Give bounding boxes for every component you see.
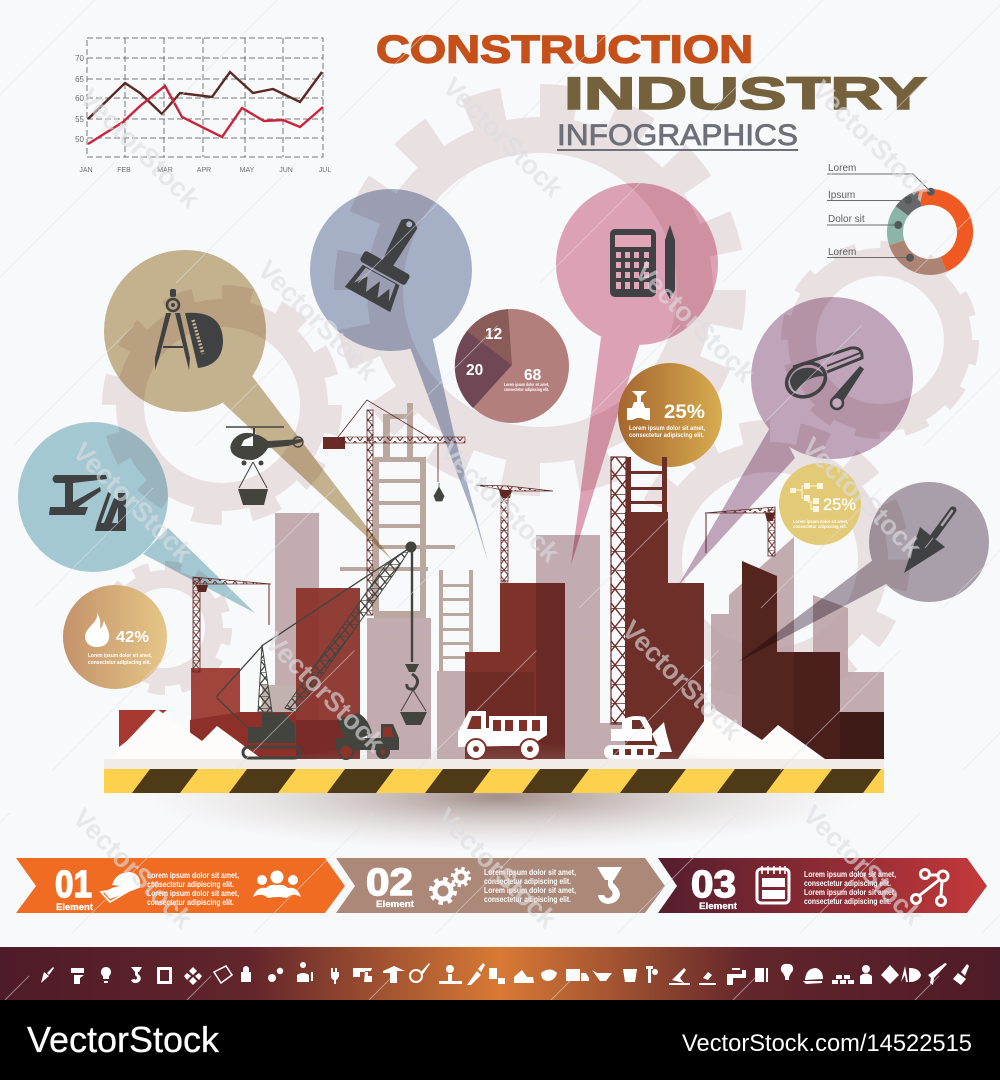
stat circle: 42 percent: Lorem ipsum dolor sit amet, xyxy=(88,653,152,659)
ribbon: element 03: consectetur adipiscing elit. xyxy=(804,896,891,906)
x axis labels: APR xyxy=(197,167,211,174)
ribbon: element 02: 02 xyxy=(366,862,413,904)
watermark text: VectorStock xyxy=(252,255,384,387)
donut legend labels: Dolor sit xyxy=(828,214,865,225)
ribbon: element 03 xyxy=(658,858,987,913)
speech bubble: tan xyxy=(104,250,392,560)
line chart xyxy=(75,38,331,174)
title: construction: CONSTRUCTION xyxy=(376,28,753,72)
x axis labels: FEB xyxy=(117,167,131,174)
city skyline, light buildings xyxy=(262,513,884,759)
speech bubble: teal xyxy=(18,422,255,613)
ribbon: element 02: Lorem ipsum dolor sit amet, xyxy=(484,885,576,895)
stat circle: 42 percent: consectetur adipiscing elit. xyxy=(88,660,151,666)
ribbon: element 02 xyxy=(336,858,665,913)
x axis labels: JUL xyxy=(319,167,331,174)
donut legend labels: Lorem xyxy=(828,247,856,258)
crane hook and bucket xyxy=(400,664,427,725)
y axis labels: 50 xyxy=(75,135,85,144)
x axis labels: MAR xyxy=(157,167,173,174)
watermark text: VectorStock xyxy=(796,432,928,564)
pie values: 20 xyxy=(466,362,483,379)
ribbon: element 01: consectetur adipiscing elit. xyxy=(147,879,234,889)
tower crane: center xyxy=(323,400,465,615)
y axis labels xyxy=(75,54,85,144)
y axis labels: 55 xyxy=(75,115,85,124)
watermark text: VectorStock xyxy=(74,83,206,215)
icon: flame xyxy=(85,613,109,647)
icon: gears xyxy=(431,868,470,903)
ground strip and floor shadow xyxy=(104,743,884,851)
stat circle: 42 percent xyxy=(63,585,167,689)
icon: flowchart xyxy=(790,483,823,512)
x axis labels: MAY xyxy=(240,167,255,174)
y axis labels: 70 xyxy=(75,54,85,63)
ribbon: element 02: consectetur adipiscing elit. xyxy=(484,876,571,886)
ribbon: element 01 xyxy=(16,858,345,913)
stat circle: valve 25 percent xyxy=(618,363,722,467)
watermark text: VectorStock xyxy=(434,437,566,569)
y axis labels: 65 xyxy=(75,75,85,84)
watermark text: VectorStock xyxy=(259,627,391,759)
ribbon: element 02: Element xyxy=(376,899,414,909)
ribbon: element 03: 03 xyxy=(691,864,736,906)
lattice tower with ladder xyxy=(611,457,667,724)
ribbon: element 03: Lorem ipsum dolor sit amet, xyxy=(804,869,896,879)
icon: compass and protractor xyxy=(155,289,223,370)
footer bar: VectorStock xyxy=(27,1019,220,1060)
watermark text: VectorStock xyxy=(437,72,569,204)
hazard stripe bar xyxy=(104,769,884,793)
ribbon: element 01: 01 xyxy=(55,864,92,906)
stat circle: valve 25 percent: 25% xyxy=(664,402,705,423)
chart series: brown xyxy=(88,72,322,119)
x axis labels xyxy=(79,167,331,174)
y axis labels: 60 xyxy=(75,94,85,103)
watermark text xyxy=(67,72,938,935)
icon: paint brush xyxy=(345,207,434,312)
icon: truss beams xyxy=(49,475,126,531)
donut legend labels xyxy=(828,163,865,258)
stat circle: flowchart 25 percent: consectetur adipiscing elit. xyxy=(793,524,847,529)
pie values: 68 xyxy=(524,367,542,384)
speech bubble: gray xyxy=(738,482,989,662)
title: industry: INDUSTRY xyxy=(564,68,927,119)
pie chart circle xyxy=(455,309,569,423)
icon: hard hat xyxy=(101,872,140,902)
icon: network nodes xyxy=(912,870,948,906)
stat circle: valve 25 percent: Lorem ipsum dolor sit amet, xyxy=(629,425,705,432)
donut chart with legend xyxy=(827,163,965,267)
watermark text: VectorStock xyxy=(797,800,929,932)
stat circle: flowchart 25 percent xyxy=(779,463,861,545)
watermark text: VectorStock xyxy=(67,437,199,569)
stat circle: flowchart 25 percent: 25% xyxy=(823,496,856,514)
ribbon: element 01: Lorem ipsum dolor sit amet, xyxy=(147,888,239,898)
mixer truck xyxy=(335,713,399,759)
donut legend labels: Ipsum xyxy=(828,190,855,201)
icon: valve xyxy=(627,391,650,420)
tower crane: right xyxy=(705,507,775,556)
ribbon: element 03: Lorem ipsum dolor sit amet, xyxy=(804,887,896,897)
ribbon: element 01: Element xyxy=(56,902,93,912)
pie values xyxy=(466,326,549,392)
icon: pipes xyxy=(781,348,864,409)
scaffold tower and ladders xyxy=(340,403,473,672)
footer bar: VectorStock.com/14522515 xyxy=(682,1031,972,1057)
stat circle: valve 25 percent: consectetur adipiscing elit. xyxy=(629,432,704,439)
icon: crane hook xyxy=(597,867,622,904)
watermark text: VectorStock xyxy=(616,615,748,747)
ribbon: element 01: Lorem ipsum dolor sit amet, xyxy=(147,870,239,880)
x axis labels: JAN xyxy=(79,167,93,174)
speech bubble: blue xyxy=(310,189,488,562)
speech bubble: pink xyxy=(556,183,718,565)
watermark text: VectorStock xyxy=(67,803,199,935)
helicopter xyxy=(226,427,303,505)
icon: people group xyxy=(253,870,301,898)
title: infographics: INFOGRAPHICS xyxy=(557,119,798,152)
watermark text: VectorStock xyxy=(806,75,938,207)
hook bucket xyxy=(434,483,444,501)
watermark text: VectorStock xyxy=(629,257,761,389)
ribbon: element 02: consectetur adipiscing elit. xyxy=(484,894,571,904)
donut legend labels: Lorem xyxy=(828,163,856,174)
pie values: Lorem ipsum dolor sit amet, xyxy=(504,382,549,387)
toolbar icons xyxy=(41,962,969,985)
background gears xyxy=(105,102,972,688)
snow mounds xyxy=(110,708,825,759)
bulldozer xyxy=(604,716,672,759)
city skyline, dark red buildings xyxy=(119,512,884,759)
x axis labels: JUN xyxy=(279,167,293,174)
watermark text: VectorStock xyxy=(431,803,563,935)
speech bubble: purple xyxy=(678,297,913,586)
tower crane: middle xyxy=(476,485,553,582)
crawler crane xyxy=(216,542,427,758)
ribbon: element 01: consectetur adipiscing elit. xyxy=(147,897,234,907)
tower crane: left xyxy=(193,577,271,672)
stat circle: 42 percent: 42% xyxy=(116,629,149,646)
icon: calendar xyxy=(757,866,789,903)
icon: calculator and pencil xyxy=(610,225,675,299)
ribbon: element 02: Lorem ipsum dolor sit amet, xyxy=(484,867,576,877)
footer bar xyxy=(0,1000,1000,1080)
chart series: red xyxy=(88,86,323,144)
ribbon: element 03: consectetur adipiscing elit. xyxy=(804,878,891,888)
stat circle: flowchart 25 percent: Lorem ipsum dolor sit amet, xyxy=(793,519,848,524)
pie values: 12 xyxy=(485,326,502,343)
dump truck xyxy=(458,711,547,759)
icon: trowel xyxy=(904,510,953,573)
icon toolbar band xyxy=(0,947,1000,1000)
pie values: consectetur adipiscing elit. xyxy=(504,387,549,392)
ribbon: element 03: Element xyxy=(699,901,737,911)
